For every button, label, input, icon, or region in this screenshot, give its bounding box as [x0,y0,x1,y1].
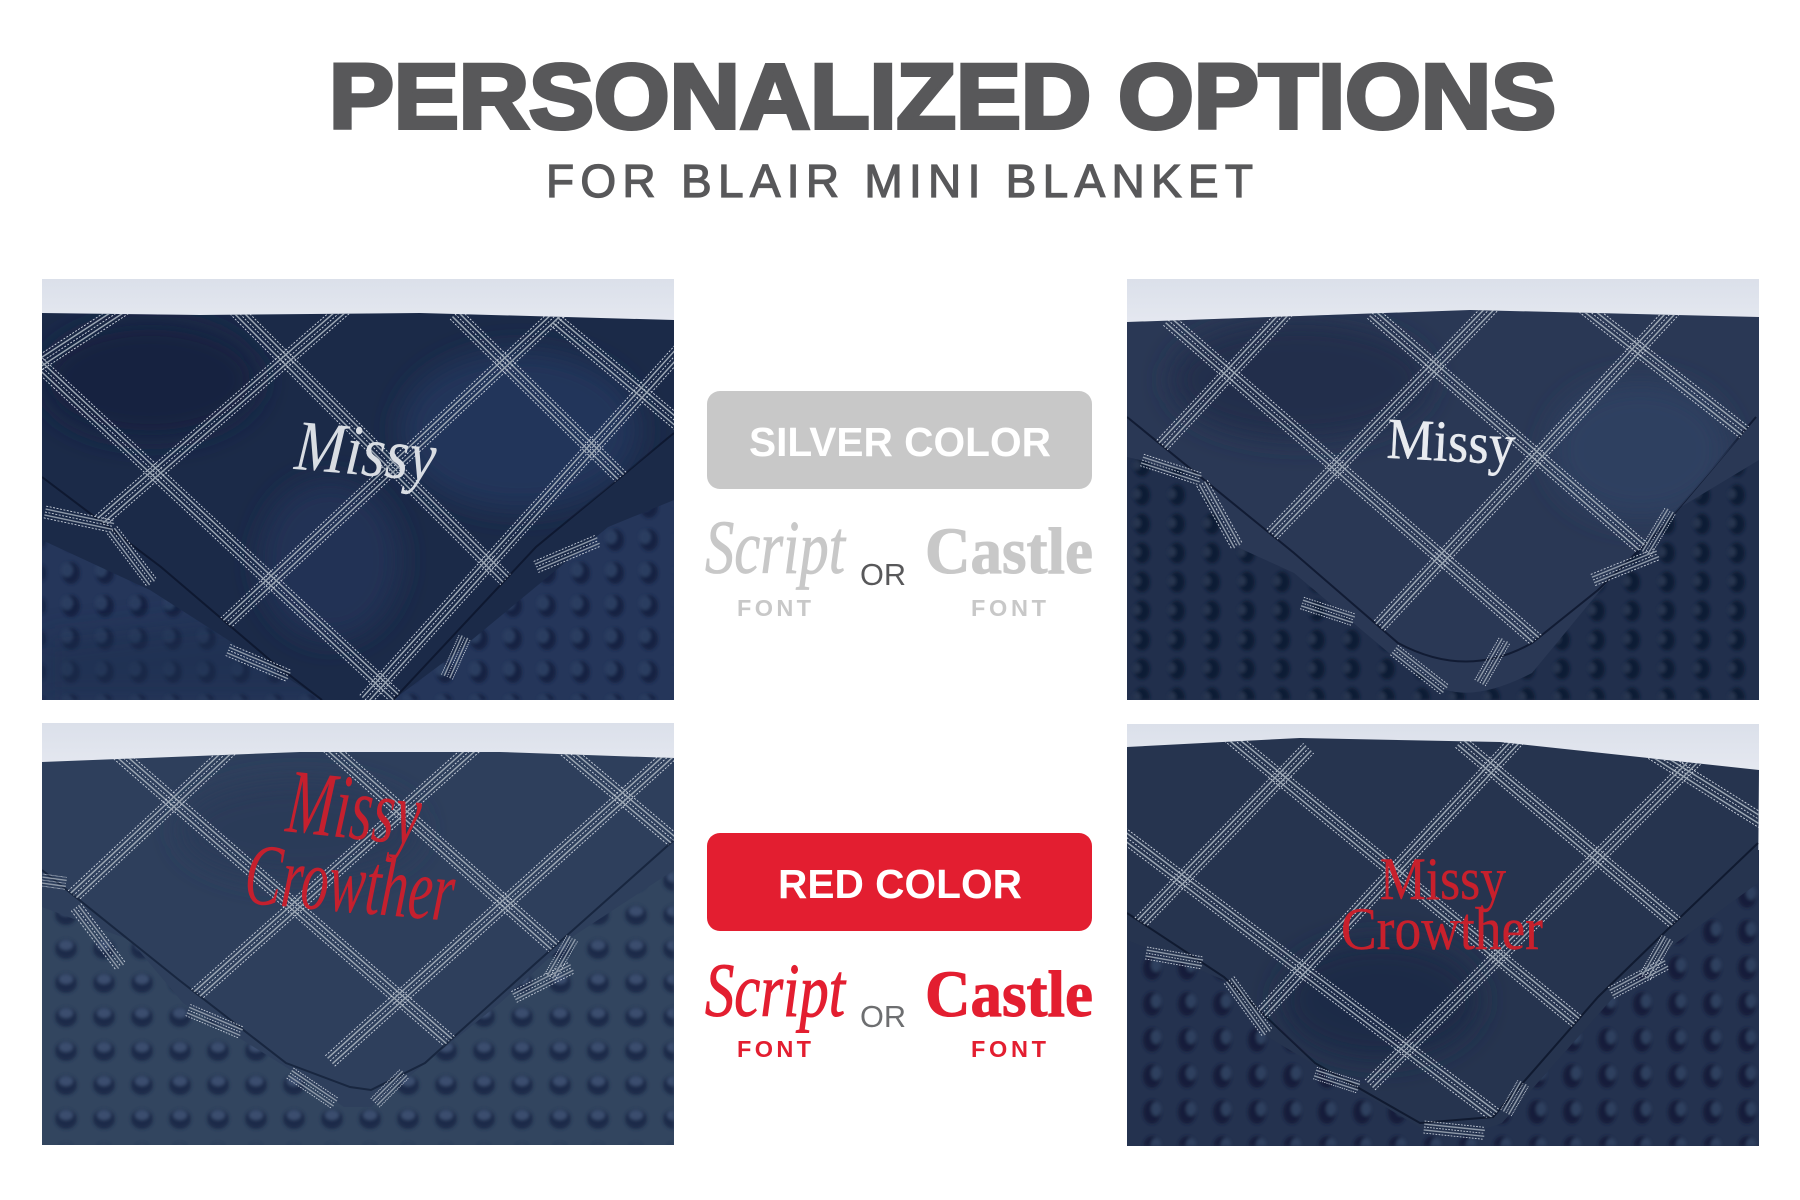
castle font sample: Castle [925,958,1093,1031]
photo: red castle embroidery on blanket [1127,724,1759,1146]
embroidered name: Missy Crowther (script): Missy [281,750,426,865]
embroidered name: Missy (castle): Missy [1386,406,1517,477]
or separator: OR [860,999,906,1034]
red color badge: RED COLOR [778,861,1022,907]
castle font sample: Castle [925,515,1093,588]
embroidered name: Missy (script): Missy [291,405,440,497]
font label right: FONT [971,1036,1047,1062]
embroidered name: Missy Crowther (script): Crowther [241,826,459,941]
or separator: OR [860,557,906,592]
panel: silver color options [705,391,1093,621]
red color badge [707,833,1092,931]
font label left: FONT [737,595,812,621]
silver color badge [707,391,1092,489]
embroidered name: Missy Crowther (script) [248,772,456,920]
embroidered name: Missy Crowther (castle): Crowther [1341,896,1543,962]
embroidered name: Missy Crowther (castle) [1343,858,1543,950]
photo: silver script embroidery on blanket [42,279,674,700]
title: PERSONALIZED OPTIONS [329,46,1556,148]
font label right: FONT [971,595,1047,621]
photo: silver castle embroidery on blanket [1127,279,1759,700]
photo: red script embroidery on blanket [42,723,674,1145]
subtitle: FOR BLAIR MINI BLANKET [546,155,1253,207]
script font sample: Script [705,949,846,1033]
script font sample: Script [705,506,846,590]
font label left: FONT [737,1036,812,1062]
silver color badge: SILVER COLOR [749,419,1051,465]
embroidered name: Missy Crowther (castle): Missy [1380,846,1506,912]
panel: red color options [705,833,1093,1062]
